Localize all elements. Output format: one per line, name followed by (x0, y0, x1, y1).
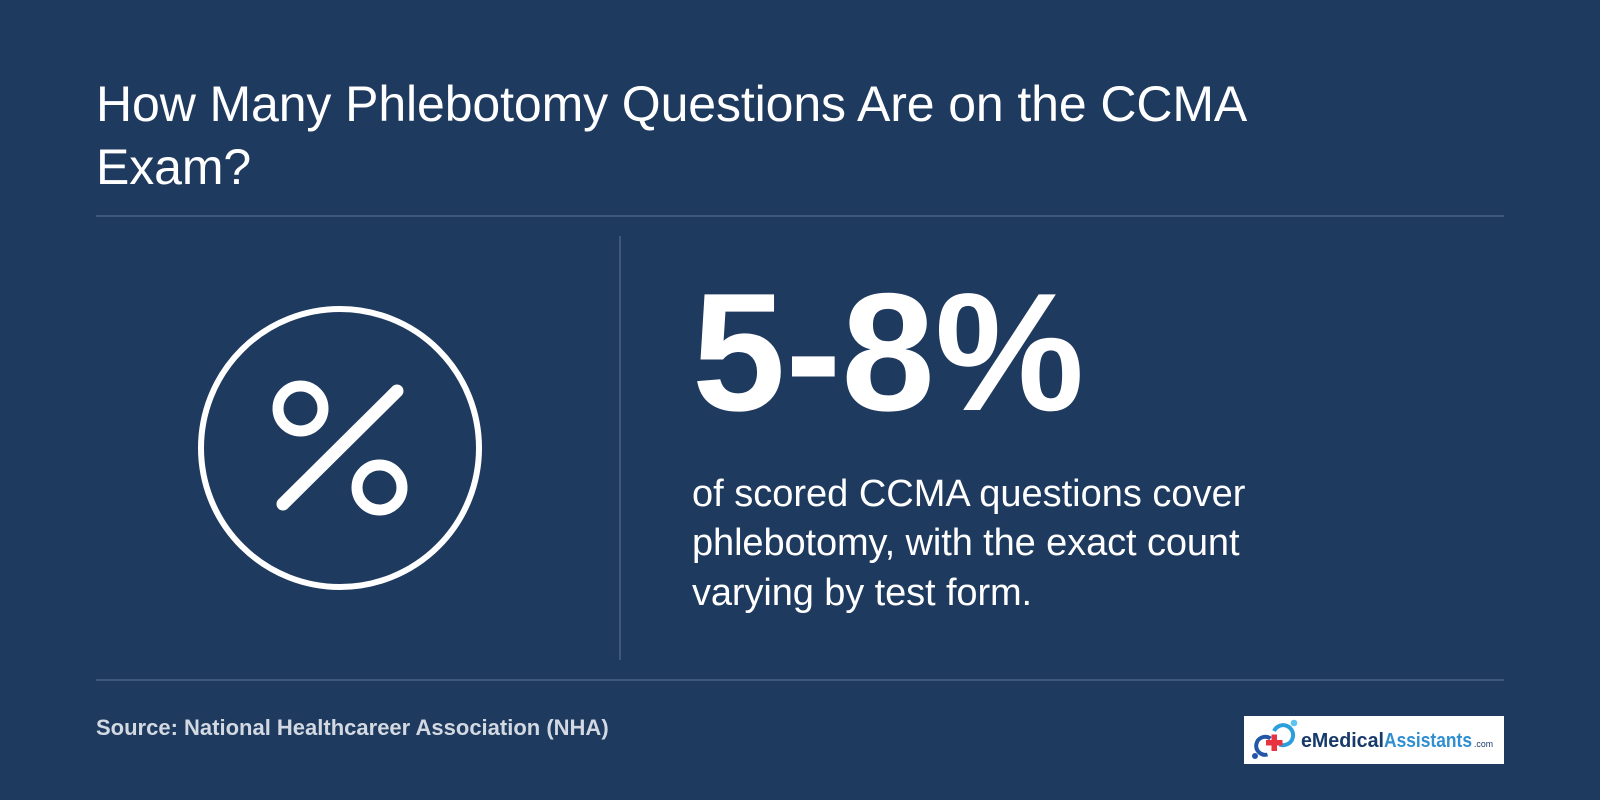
title: Exam? (96, 139, 251, 195)
icon: percent in circle (198, 306, 482, 590)
big statistic: 5-8% (692, 258, 1084, 446)
description text: phlebotomy, with the exact count (692, 522, 1239, 564)
title (96, 76, 1248, 195)
title: How Many Phlebotomy Questions Are on the CCMA (96, 76, 1247, 132)
icon: logo mark (1252, 720, 1297, 759)
logo: Assistants (1384, 729, 1472, 752)
description text: varying by test form. (692, 572, 1032, 614)
wordmark: eMedical (1301, 729, 1384, 752)
source: Source: National Healthcareer Association (NHA) (96, 715, 609, 740)
logo (1244, 716, 1504, 764)
description text (692, 473, 1245, 614)
description text: of scored CCMA questions cover (692, 473, 1245, 515)
logo: .com (1474, 739, 1493, 750)
